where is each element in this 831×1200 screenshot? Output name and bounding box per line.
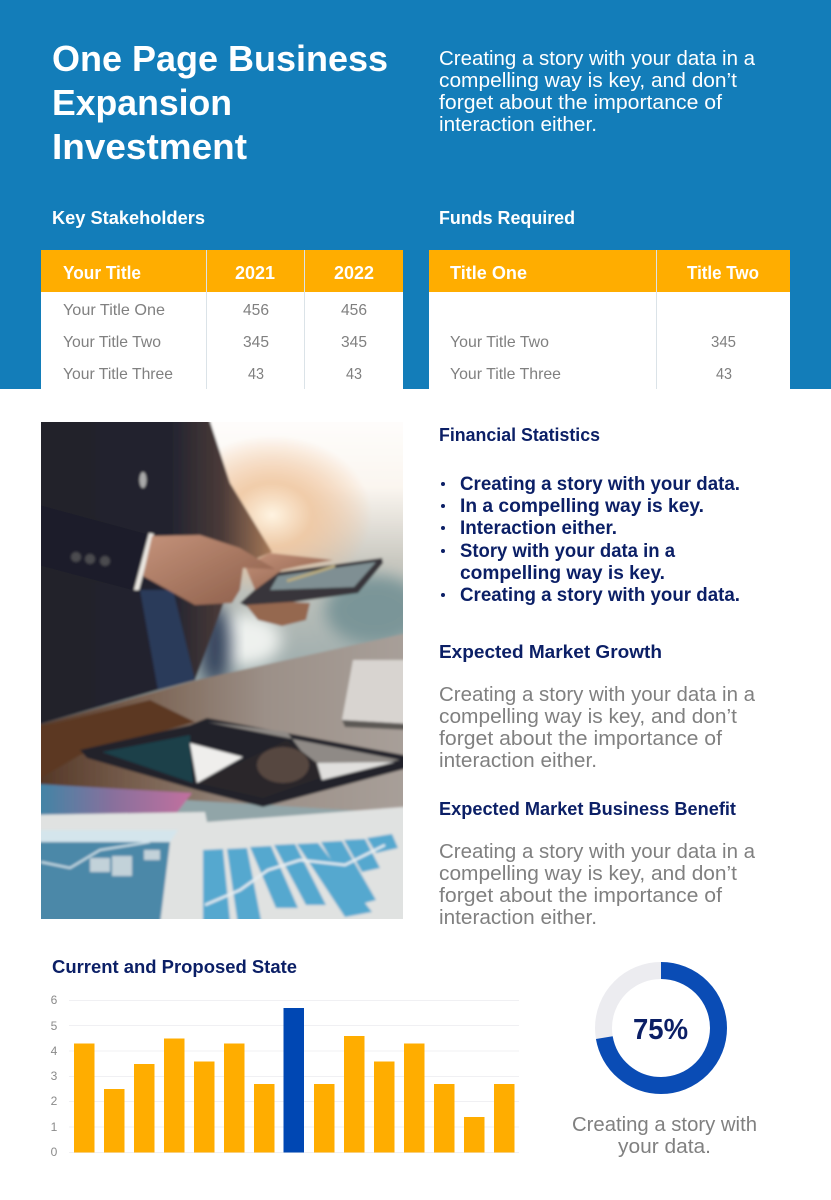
text: business benefit: forget about the importance of bbox=[439, 885, 722, 907]
title: One Page Business bbox=[52, 38, 388, 79]
text: market growth: interaction either. bbox=[439, 750, 597, 772]
table: key stakeholders: Your Title Three bbox=[63, 366, 173, 383]
table: key stakeholders: 345 bbox=[341, 334, 367, 351]
heading: expected market business benefit: Expected Market Business Benefit bbox=[439, 798, 736, 819]
bar chart: 2 bbox=[51, 1094, 58, 1108]
bar chart: 0 bbox=[51, 1145, 58, 1159]
table: key stakeholders bbox=[41, 250, 403, 389]
bullet list: Interaction either. bbox=[460, 518, 617, 539]
bullet list: Creating a story with your data. bbox=[460, 474, 740, 495]
heading: current and proposed state: Current and Proposed State bbox=[52, 956, 297, 977]
bullet list bbox=[441, 474, 740, 606]
table: key stakeholders: 456 bbox=[341, 302, 367, 319]
intro text: interaction either. bbox=[439, 114, 597, 136]
table: funds required: Title One bbox=[450, 263, 527, 283]
table: key stakeholders: 2022 bbox=[334, 263, 374, 283]
text: market growth: forget about the importance of bbox=[439, 728, 722, 750]
intro text: compelling way is key, and don’t bbox=[439, 70, 737, 92]
donut chart: 75%: 75% bbox=[633, 1014, 688, 1046]
photo: businessman using phone over tablet and charts bbox=[41, 422, 403, 919]
heading: expected market growth: Expected Market Growth bbox=[439, 641, 662, 662]
title bbox=[52, 38, 388, 167]
table: key stakeholders: 43 bbox=[346, 366, 362, 383]
table: key stakeholders: 345 bbox=[243, 334, 269, 351]
heading: key stakeholders: Key Stakeholders bbox=[52, 207, 205, 228]
donut caption: Creating a story with bbox=[572, 1114, 757, 1136]
intro text: Creating a story with your data in a bbox=[439, 48, 756, 70]
text: market growth: Creating a story with your data in a bbox=[439, 684, 756, 706]
heading: funds required: Funds Required bbox=[439, 207, 575, 228]
table: key stakeholders: Your Title bbox=[63, 263, 141, 283]
table: funds required: Your Title Two bbox=[450, 334, 549, 351]
bar chart: 5 bbox=[51, 1019, 58, 1033]
text: business benefit: interaction either. bbox=[439, 907, 597, 929]
donut chart: 75% bbox=[604, 970, 718, 1086]
bullet list: compelling way is key. bbox=[460, 563, 665, 584]
table: key stakeholders: 456 bbox=[243, 302, 269, 319]
table: key stakeholders: Your Title Two bbox=[63, 334, 161, 351]
title: Investment bbox=[52, 126, 247, 167]
bar chart: 4 bbox=[51, 1044, 58, 1058]
donut caption: your data. bbox=[618, 1136, 711, 1158]
bullet list: Creating a story with your data. bbox=[460, 585, 740, 606]
text: business benefit: compelling way is key, and don’t bbox=[439, 863, 737, 885]
bar chart: 1 bbox=[51, 1120, 58, 1134]
table: funds required: Title Two bbox=[687, 263, 759, 283]
table: key stakeholders: Your Title One bbox=[63, 302, 165, 319]
table: funds required: 43 bbox=[716, 366, 732, 383]
intro text bbox=[439, 48, 756, 136]
table: key stakeholders: 43 bbox=[248, 366, 264, 383]
table: funds required bbox=[429, 250, 790, 389]
donut caption bbox=[572, 1114, 757, 1158]
header band bbox=[0, 0, 831, 389]
table: key stakeholders: 2021 bbox=[235, 263, 275, 283]
title: Expansion bbox=[52, 82, 232, 123]
bar chart: 6 bbox=[51, 993, 58, 1007]
heading: financial statistics: Financial Statistics bbox=[439, 424, 600, 445]
table: funds required: Your Title Three bbox=[450, 366, 561, 383]
bullet list: In a compelling way is key. bbox=[460, 496, 704, 517]
text: business benefit: Creating a story with your data in a bbox=[439, 841, 756, 863]
bullet list: Story with your data in a bbox=[460, 541, 675, 562]
text: market growth: compelling way is key, and don’t bbox=[439, 706, 737, 728]
bar chart: 3 bbox=[51, 1069, 58, 1083]
text: business benefit bbox=[439, 841, 756, 929]
intro text: forget about the importance of bbox=[439, 92, 722, 114]
text: market growth bbox=[439, 684, 756, 772]
table: funds required: 345 bbox=[711, 334, 736, 351]
bar chart bbox=[51, 993, 519, 1159]
